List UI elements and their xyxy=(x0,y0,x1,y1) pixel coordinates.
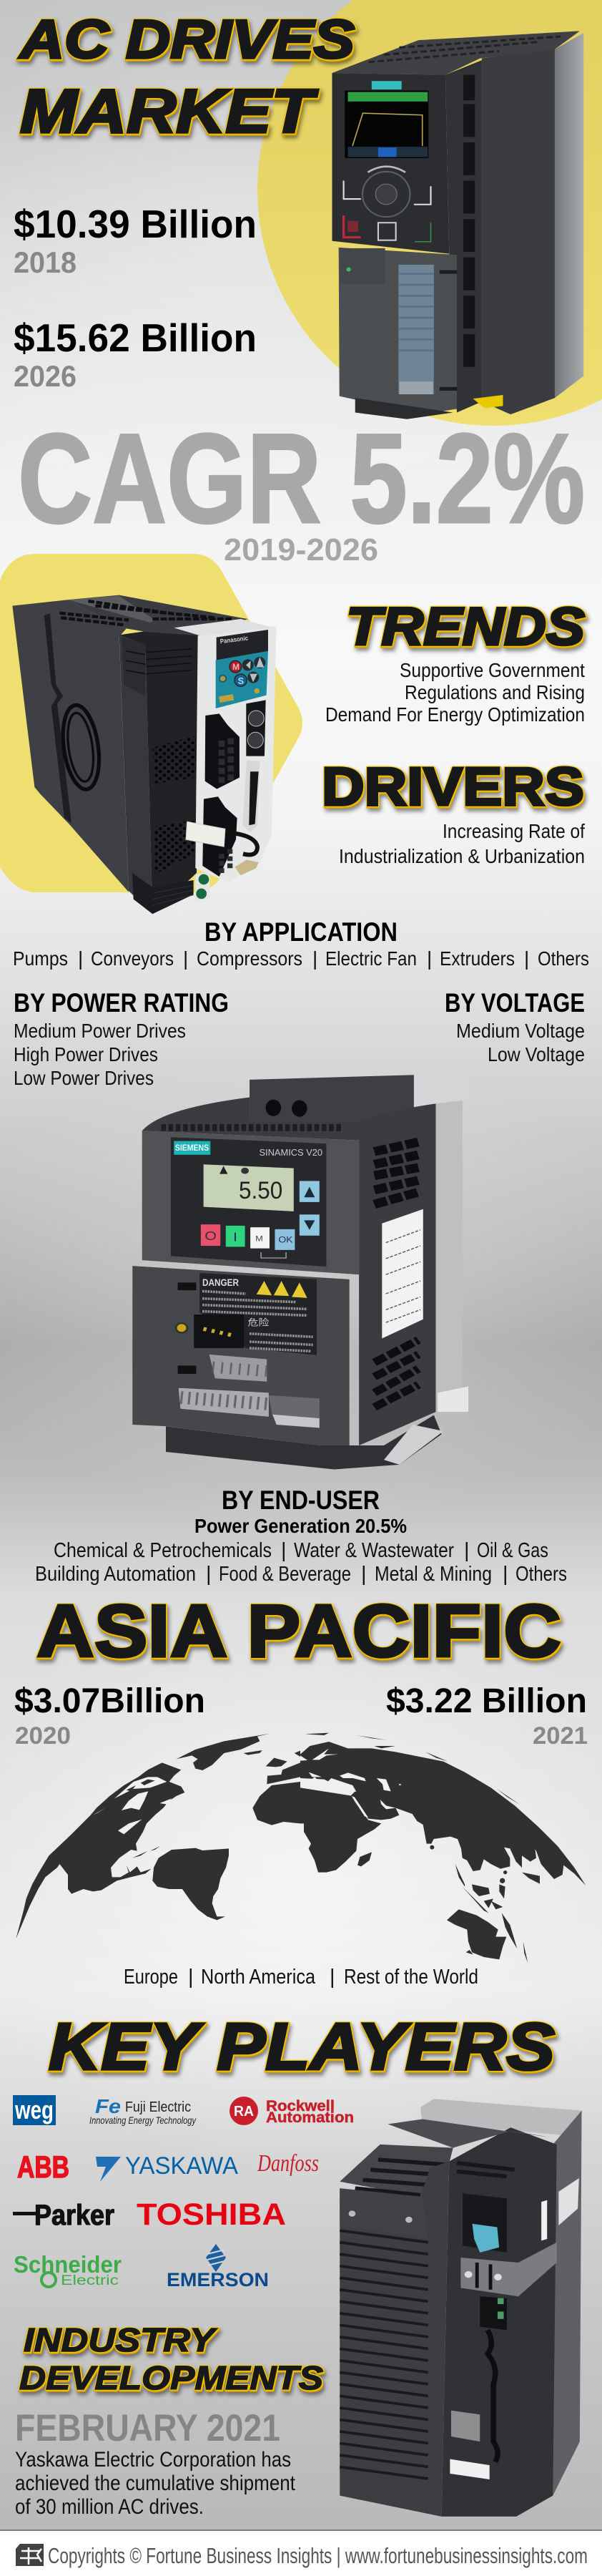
market value 2018: $10.39 Billion xyxy=(14,202,257,246)
market value 2026 xyxy=(14,316,257,393)
regions list xyxy=(124,1966,478,1989)
regions list: Europe xyxy=(124,1966,178,1989)
map: Americas and west xyxy=(16,1734,300,1938)
by end-user: Water & Wastewater xyxy=(294,1539,454,1562)
logo: Toshiba: TOSHIBA xyxy=(137,2197,286,2232)
by application: BY APPLICATION xyxy=(204,917,398,947)
regions list: | xyxy=(188,1966,194,1989)
logo: Schneider Electric xyxy=(14,2251,122,2288)
asia pacific 2021 value: $3.22 Billion xyxy=(386,1682,587,1720)
asia pacific 2021 value xyxy=(386,1682,588,1750)
logo: Fuji Electric: Fuji Electric xyxy=(125,2099,191,2115)
logo: ABB: ABB xyxy=(17,2150,69,2185)
development text: Yaskawa Electric Corporation has xyxy=(15,2448,291,2472)
by power rating: Low Power Drives xyxy=(14,1067,154,1089)
image: Sinamics V20 drive: I xyxy=(233,1230,237,1244)
logo: Yaskawa: YASKAWA xyxy=(125,2152,238,2180)
heading: asia pacific: ASIA PACIFIC xyxy=(36,1590,561,1673)
by application xyxy=(13,917,589,970)
by application: Others xyxy=(538,947,589,970)
logo: Emerson xyxy=(167,2244,269,2290)
market value 2026: 2026 xyxy=(14,359,77,393)
by voltage xyxy=(445,988,585,1065)
logo: Schneider Electric: Electric xyxy=(61,2273,119,2288)
by end-user: | xyxy=(281,1539,287,1562)
by end-user: | xyxy=(206,1563,212,1586)
image: Sinamics V20 drive: OK xyxy=(278,1235,293,1244)
image: Panasonic drive: S xyxy=(238,676,244,686)
world map xyxy=(16,1733,586,1963)
image: Sinamics V20 drive: 5.50 xyxy=(239,1176,282,1204)
asia pacific 2020 value: 2020 xyxy=(15,1722,71,1750)
by end-user: Metal & Mining xyxy=(375,1563,492,1586)
by end-user: Food & Beverage xyxy=(219,1563,351,1586)
by power rating: BY POWER RATING xyxy=(14,988,229,1018)
by end-user: Building Automation xyxy=(35,1563,196,1586)
asia pacific 2021 value: 2021 xyxy=(533,1722,588,1750)
title: AC DRIVES xyxy=(19,9,355,70)
by voltage: Medium Voltage xyxy=(456,1020,585,1042)
logo: WEG: weg xyxy=(14,2095,54,2124)
image: Sinamics V20 drive: 危险 xyxy=(247,1317,270,1327)
by application: Extruders xyxy=(440,947,515,970)
logo: Emerson: EMERSON xyxy=(167,2269,269,2290)
by end-user: Oil & Gas xyxy=(477,1539,548,1562)
by application: Compressors xyxy=(197,947,302,970)
logo: Fuji Electric xyxy=(89,2095,197,2126)
by end-user: Power Generation 20.5% xyxy=(194,1515,407,1537)
logo: Rockwell Automation: Rockwell xyxy=(266,2098,335,2114)
by end-user: Chemical & Petrochemicals xyxy=(54,1539,272,1562)
image: Sinamics V20 drive: SINAMICS V20 xyxy=(259,1147,322,1158)
development date: FEBRUARY 2021 xyxy=(15,2407,280,2449)
by end-user: | xyxy=(361,1563,367,1586)
icon: Fortune Business Insights logo xyxy=(16,2544,44,2566)
image: Panasonic drive: Panasonic xyxy=(219,635,249,645)
by power rating: High Power Drives xyxy=(14,1043,158,1065)
by application: | xyxy=(78,947,83,970)
image: Sinamics V20 drive: M xyxy=(255,1234,263,1243)
by application: Conveyors xyxy=(91,947,174,970)
regions list: Rest of the World xyxy=(344,1966,478,1989)
CAGR period: 2019-2026 xyxy=(224,532,378,567)
market value 2018: 2018 xyxy=(14,245,77,279)
map: Eurasia, Africa and Australia xyxy=(300,1733,586,1963)
image: Sinamics V20 drive xyxy=(132,1068,468,1470)
by end-user: Others xyxy=(515,1563,567,1586)
image: Siemens drive G120 xyxy=(332,31,583,419)
image: Sinamics V20 drive: SIEMENS xyxy=(175,1143,209,1153)
by application: | xyxy=(183,947,188,970)
by end-user: BY END-USER xyxy=(222,1485,380,1515)
by power rating: Medium Power Drives xyxy=(14,1020,186,1042)
by application: | xyxy=(312,947,317,970)
logo: Rockwell Automation: RA xyxy=(234,2104,254,2119)
heading: industry developments: INDUSTRY xyxy=(24,2321,218,2358)
by power rating xyxy=(14,988,229,1089)
by voltage: Low Voltage xyxy=(488,1043,585,1065)
logo: Schneider Electric: Schneider xyxy=(14,2251,122,2278)
drivers text: Increasing Rate of xyxy=(443,820,585,842)
trends text xyxy=(325,659,585,726)
image: Siemens S120 drive xyxy=(340,2099,582,2517)
development text: of 30 million AC drives. xyxy=(15,2495,204,2519)
logo: Parker: Parker xyxy=(34,2200,114,2231)
heading: industry developments xyxy=(19,2321,323,2396)
title: MARKET xyxy=(20,77,318,146)
heading: key players: KEY PLAYERS xyxy=(49,2009,555,2084)
logo: Rockwell Automation xyxy=(230,2097,354,2126)
yellow circle backdrop xyxy=(257,0,602,426)
asia pacific 2020 value: $3.07Billion xyxy=(14,1682,205,1720)
by application: Electric Fan xyxy=(325,947,417,970)
heading: trends: TRENDS xyxy=(346,597,585,656)
development text xyxy=(15,2448,296,2519)
logo: Fuji Electric: Fe xyxy=(95,2095,121,2117)
market value 2026: $15.62 Billion xyxy=(14,316,257,360)
by end-user: | xyxy=(464,1539,470,1562)
yellow hexagon backdrop xyxy=(0,554,302,892)
drivers text xyxy=(339,820,585,867)
heading: industry developments: DEVELOPMENTS xyxy=(19,2359,323,2396)
by application: Pumps xyxy=(13,947,68,970)
logo: Danfoss: Danfoss xyxy=(257,2150,319,2177)
asia pacific 2020 value xyxy=(14,1682,205,1750)
market value 2018 xyxy=(14,202,257,279)
heading: drivers: DRIVERS xyxy=(322,756,584,816)
image: Sinamics V20 drive: DANGER xyxy=(202,1278,239,1288)
image: Panasonic drive: M xyxy=(232,662,240,672)
image: Sinamics V20 drive: O xyxy=(204,1229,217,1244)
development text: achieved the cumulative shipment xyxy=(15,2472,296,2495)
logo: Rockwell Automation: Automation xyxy=(266,2109,354,2126)
logo: Fuji Electric: Innovating Energy Technology xyxy=(89,2114,197,2126)
by end-user: | xyxy=(503,1563,508,1586)
by application: | xyxy=(427,947,432,970)
image: Panasonic drive xyxy=(12,595,277,914)
regions list: | xyxy=(330,1966,335,1989)
footer xyxy=(0,2529,602,2576)
regions list: North America xyxy=(201,1966,316,1989)
title xyxy=(19,9,355,146)
by end-user xyxy=(35,1485,567,1586)
by application: | xyxy=(524,947,529,970)
